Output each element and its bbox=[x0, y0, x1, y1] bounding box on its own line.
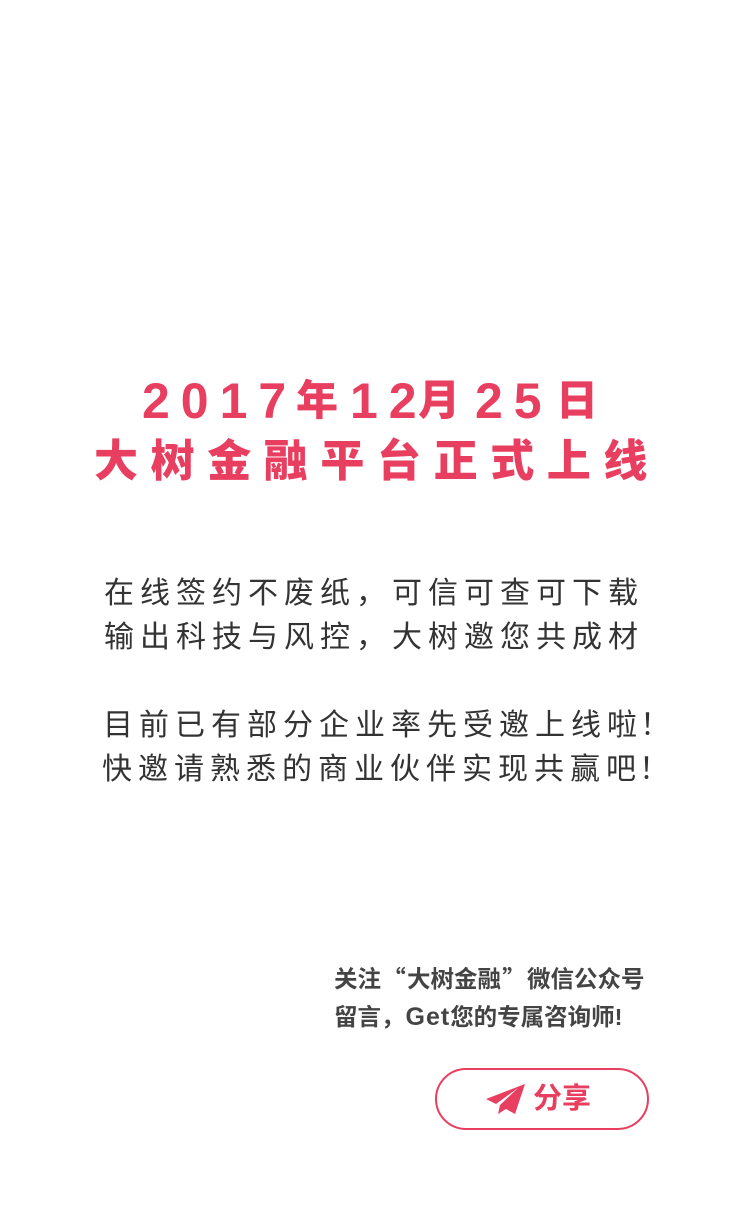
call to action line 1: 目前已有部分企业率先受邀上线啦！ bbox=[103, 709, 676, 742]
text block: intro bbox=[104, 577, 644, 654]
follow note line 1: 关注 大树金融 微信公众号 bbox=[334, 966, 644, 992]
share button bbox=[435, 1068, 649, 1130]
title line 1: 2017 bbox=[142, 373, 297, 429]
title line 1: 月 bbox=[418, 377, 460, 424]
title line 1: 25 bbox=[475, 373, 553, 429]
title line 1: 12 bbox=[350, 373, 428, 429]
title line 1 bbox=[142, 373, 598, 429]
call to action line 2: 快邀请熟悉的商业伙伴实现共赢吧！ bbox=[102, 753, 675, 786]
share label: 分享 bbox=[533, 1083, 591, 1115]
intro line 1: 在线签约不废纸，可信可查可下载 bbox=[104, 577, 644, 610]
follow note line 1: “ bbox=[382, 960, 406, 994]
title bbox=[94, 373, 660, 486]
text block: call to action bbox=[102, 709, 676, 786]
title line 2: 大树金融平台正式上线 bbox=[94, 437, 660, 486]
intro line 2: 输出科技与风控，大树邀您共成材 bbox=[104, 621, 644, 654]
title line 1: 日 bbox=[556, 377, 598, 424]
title line 1: 年 bbox=[296, 377, 338, 424]
follow note line 2: 留言，Get您的专属咨询师! bbox=[334, 1003, 623, 1031]
follow note line 1: ” bbox=[502, 960, 526, 994]
text block: follow note bbox=[334, 960, 644, 1031]
icon: paper plane bbox=[486, 1084, 525, 1114]
